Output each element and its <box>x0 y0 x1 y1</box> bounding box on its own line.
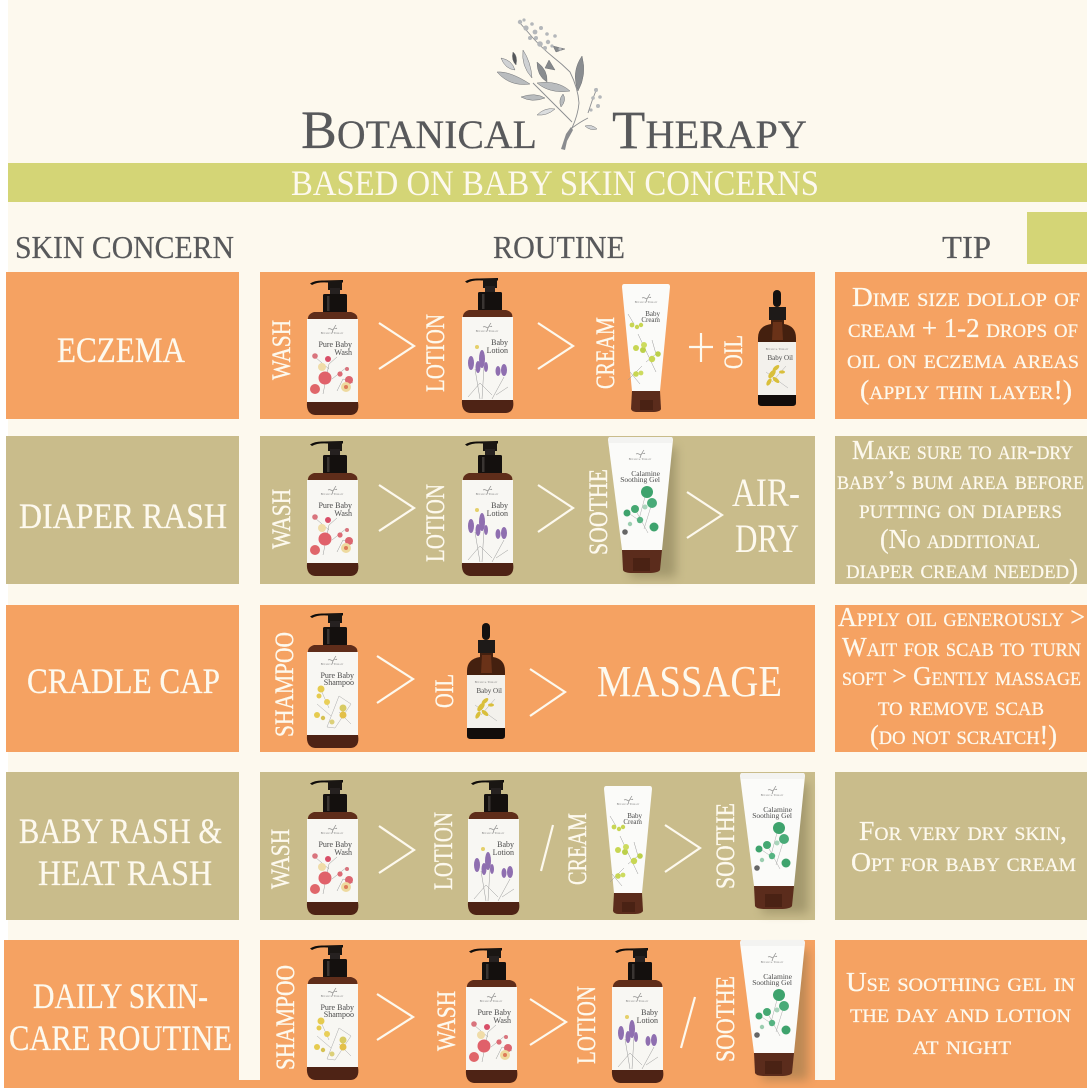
label: lotion: LOTION <box>429 812 458 890</box>
icon: baby oil bottle <box>467 623 505 739</box>
panel: routine daily <box>271 940 808 1083</box>
arrow <box>538 323 573 369</box>
label: shampoo: SHAMPOO <box>271 965 300 1070</box>
panel: concern eczema: ECZEMA <box>57 330 185 370</box>
panel: concern eczema <box>6 272 239 419</box>
icon: baby cream tube: Baby <box>645 310 660 318</box>
icon: pure baby shampoo bottle: Pure Baby <box>320 1003 354 1012</box>
icon: pure baby wash bottle: Botanical Therapy <box>321 331 344 335</box>
panel: concern baby rash and heat rash: HEAT RASH <box>38 853 212 893</box>
label: shampoo: SHAMPOO <box>270 632 299 737</box>
icon: pure baby wash bottle: Botanical Therapy <box>480 999 503 1003</box>
icon: pure baby wash bottle: Wash <box>334 509 352 518</box>
icon: pure baby wash bottle <box>466 948 517 1083</box>
icon: baby cream tube: Baby <box>627 812 642 820</box>
icon: calamine soothing gel tube: Botanical Therapy <box>761 960 784 964</box>
icon: pure baby wash bottle: Pure Baby <box>318 340 352 349</box>
label: soothe: SOOTHE <box>711 803 740 889</box>
icon: baby lotion bottle: Lotion <box>487 509 508 518</box>
title: Botanical Therapy logo <box>301 18 807 161</box>
panel: tip baby rash: For very dry skin, <box>859 816 1067 846</box>
panel: tip diaper rash <box>835 435 1087 584</box>
icon: baby lotion bottle: Baby <box>497 840 514 849</box>
icon: pure baby shampoo bottle: Shampoo <box>324 1010 354 1019</box>
icon: pure baby wash bottle <box>307 280 358 415</box>
icon: baby lotion bottle: Lotion <box>487 346 508 355</box>
panel: concern baby rash and heat rash <box>6 772 239 920</box>
panel: concern daily skin-care routine: DAILY SKIN- <box>33 976 208 1016</box>
icon: baby cream tube <box>622 284 670 412</box>
icon: baby lotion bottle: Botanical Therapy <box>626 999 649 1003</box>
panel: routine cradle cap <box>260 605 815 752</box>
label: massage: MASSAGE <box>597 657 782 706</box>
icon: pure baby shampoo bottle <box>307 613 358 748</box>
panel: routine baby rash <box>260 772 815 920</box>
panel: concern daily skin-care routine: CARE ROUTINE <box>9 1018 232 1058</box>
icon: baby cream tube: Botanical Therapy <box>635 300 658 304</box>
icon: baby oil bottle: Baby Oil <box>477 687 502 695</box>
panel: tip daily: Use soothing gel in <box>846 967 1075 997</box>
panel: tip daily: the day and lotion <box>850 998 1071 1028</box>
panel: tip eczema: (apply thin layer!) <box>860 375 1072 405</box>
icon: pure baby shampoo bottle <box>307 945 358 1080</box>
icon: calamine soothing gel tube: Soothing Gel <box>752 978 792 987</box>
panel: tip diaper rash: diaper cream needed) <box>846 554 1078 584</box>
icon: baby cream tube: Cream <box>641 316 661 324</box>
icon: calamine soothing gel tube: Calamine <box>763 805 793 814</box>
icon: calamine soothing gel tube <box>740 773 808 913</box>
label: cream: CREAM <box>563 813 592 885</box>
panel: bottom row background <box>4 940 1087 1088</box>
row: baby rash and heat rash <box>6 772 1087 920</box>
icon: calamine soothing gel tube: Calamine <box>631 469 661 478</box>
icon: baby cream tube: Botanical Therapy <box>617 802 640 806</box>
row: diaper rash <box>6 435 1087 584</box>
icon: pure baby wash bottle: Pure Baby <box>477 1008 511 1017</box>
panel: routine diaper rash <box>260 436 815 584</box>
icon: pure baby wash bottle <box>307 441 358 576</box>
icon: pure baby shampoo bottle: Botanical Therapy <box>321 662 344 666</box>
icon: baby cream tube <box>604 786 652 914</box>
panel: tip cradle cap: Wait for scab to turn <box>842 632 1081 662</box>
icon: calamine soothing gel tube: Botanical Therapy <box>761 793 784 797</box>
icon: baby oil bottle: Botanical Therapy <box>766 347 789 351</box>
panel: tip baby rash <box>835 772 1087 920</box>
icon: pure baby wash bottle: Pure Baby <box>318 501 352 510</box>
panel: tip diaper rash: (No additional <box>880 524 1040 554</box>
icon: calamine soothing gel tube: Soothing Gel <box>620 475 660 484</box>
plus sign <box>689 333 713 362</box>
panel: tip diaper rash: Make sure to air-dry <box>852 435 1073 465</box>
label: wash: WASH <box>432 991 461 1051</box>
banner: BASED ON BABY SKIN CONCERNS <box>291 163 819 203</box>
icon: pure baby wash bottle <box>307 780 358 915</box>
label: air-dry: DRY <box>735 516 799 561</box>
arrow <box>379 323 414 369</box>
icon: baby lotion bottle <box>612 948 663 1083</box>
row: cradle cap <box>6 602 1087 752</box>
label: soothe: SOOTHE <box>584 469 613 555</box>
panel: tip daily: at night <box>913 1030 1011 1060</box>
panel: concern baby rash and heat rash: BABY RASH & <box>19 811 222 851</box>
title word: Therapy: Therapy <box>612 98 807 161</box>
label: oil: OIL <box>719 335 748 369</box>
arrow <box>530 999 566 1045</box>
arrow <box>538 485 573 532</box>
icon: calamine soothing gel tube: Calamine <box>763 972 793 981</box>
slash separator <box>541 825 553 871</box>
panel: tip eczema: cream + 1-2 drops of <box>848 313 1078 343</box>
icon: baby oil bottle: Baby Oil <box>768 354 793 362</box>
label: wash: WASH <box>267 320 296 380</box>
label: lotion: LOTION <box>572 986 601 1064</box>
panel: concern daily skin-care routine <box>9 976 232 1058</box>
label: lotion: LOTION <box>421 314 450 392</box>
label: lotion: LOTION <box>421 484 450 562</box>
column gap <box>815 940 835 1080</box>
icon: baby lotion bottle: Botanical Therapy <box>476 492 499 496</box>
arrow <box>377 656 413 703</box>
icon: baby oil bottle <box>758 290 796 406</box>
label: oil: OIL <box>430 674 459 708</box>
icon: baby lotion bottle: Botanical Therapy <box>482 831 505 835</box>
icon: baby lotion bottle <box>462 278 513 413</box>
icon: pure baby wash bottle: Wash <box>493 1016 511 1025</box>
label: air-dry <box>732 470 800 561</box>
arrow <box>665 825 700 872</box>
column gap <box>239 940 260 1080</box>
panel: tip cradle cap: (do not scratch!) <box>870 720 1057 750</box>
panel: concern cradle cap: CRADLE CAP <box>27 661 220 701</box>
banner <box>8 163 1087 203</box>
icon: pure baby wash bottle: Wash <box>334 348 352 357</box>
icon: pure baby wash bottle: Botanical Therapy <box>321 492 344 496</box>
icon: baby lotion bottle <box>462 441 513 576</box>
icon: baby oil bottle: Botanical Therapy <box>475 680 498 684</box>
icon: botanical sprig <box>497 18 602 150</box>
panel: tip diaper rash: putting on diapers <box>859 494 1062 524</box>
title word: Botanical: Botanical <box>301 98 537 161</box>
arrow <box>687 492 722 538</box>
icon: baby lotion bottle <box>468 780 519 915</box>
label: cream: CREAM <box>591 317 620 389</box>
icon: pure baby shampoo bottle: Pure Baby <box>320 671 354 680</box>
icon: calamine soothing gel tube: Soothing Gel <box>752 811 792 820</box>
label: soothe: SOOTHE <box>711 976 740 1062</box>
panel: tip cradle cap <box>835 602 1087 752</box>
icon: baby lotion bottle: Botanical Therapy <box>476 329 499 333</box>
arrow <box>530 669 565 716</box>
icon: pure baby wash bottle: Pure Baby <box>318 840 352 849</box>
panel: tip eczema <box>835 272 1087 419</box>
panel: concern cradle cap <box>6 605 239 752</box>
panel: tip cradle cap: Apply oil generously > <box>838 602 1085 632</box>
column heading: routine: ROUTINE <box>493 229 625 265</box>
panel: tip eczema: Dime size dollop of <box>852 282 1080 312</box>
icon: pure baby wash bottle: Wash <box>334 848 352 857</box>
icon: baby lotion bottle: Baby <box>491 338 508 347</box>
arrow <box>377 994 413 1040</box>
icon: baby lotion bottle: Baby <box>491 501 508 510</box>
panel: tip cradle cap: to remove scab <box>878 691 1044 721</box>
panel: concern diaper rash: DIAPER RASH <box>19 496 227 536</box>
icon: baby cream tube: Cream <box>623 818 643 826</box>
panel: concern diaper rash <box>6 436 239 584</box>
column heading: tip: TIP <box>942 229 991 265</box>
icon: pure baby shampoo bottle: Shampoo <box>324 678 354 687</box>
icon: pure baby wash bottle: Botanical Therapy <box>321 831 344 835</box>
icon: calamine soothing gel tube <box>608 437 676 577</box>
panel: tip daily <box>846 967 1075 1060</box>
column heading: skin concern: SKIN CONCERN <box>15 229 234 265</box>
slash separator <box>681 997 695 1048</box>
row: daily skin-care routine <box>4 940 1087 1088</box>
label: wash: WASH <box>266 829 295 889</box>
panel: tip baby rash: Opt for baby cream <box>851 847 1076 877</box>
decorative green square <box>1027 212 1087 264</box>
icon: baby lotion bottle: Baby <box>641 1008 658 1017</box>
icon: calamine soothing gel tube <box>740 940 808 1080</box>
row: eczema <box>6 272 1087 419</box>
panel: tip eczema: oil on eczema areas <box>847 344 1079 374</box>
arrow <box>379 826 414 873</box>
arrow <box>379 485 414 531</box>
label: wash: WASH <box>267 489 296 549</box>
icon: baby lotion bottle: Lotion <box>493 848 514 857</box>
label: air-dry: AIR- <box>732 470 800 515</box>
icon: pure baby shampoo bottle: Botanical Therapy <box>321 994 344 998</box>
icon: calamine soothing gel tube: Botanical Therapy <box>629 457 652 461</box>
icon: baby lotion bottle: Lotion <box>637 1016 658 1025</box>
panel: routine eczema <box>260 272 815 419</box>
